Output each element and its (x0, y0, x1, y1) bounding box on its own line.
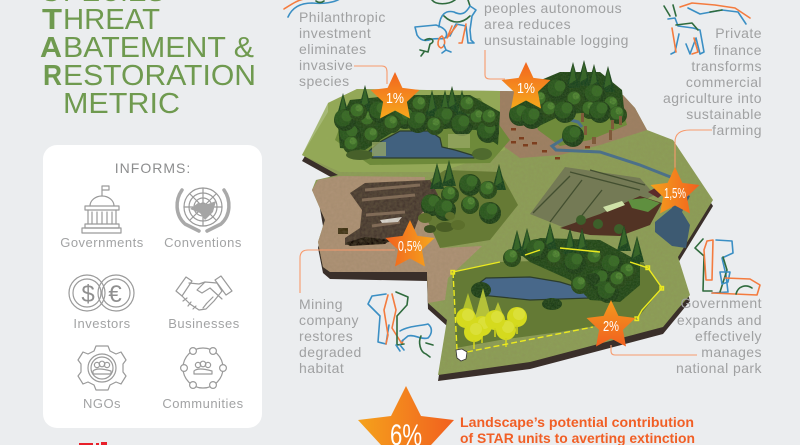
forest: top right (509, 60, 627, 147)
label: conventions: Conventions (164, 235, 242, 250)
text: private finance (663, 25, 762, 138)
label: businesses: Businesses (168, 316, 240, 331)
star: 1% philanthropic: 1% (386, 90, 404, 107)
star: 1.5% farming (650, 167, 700, 214)
text: private finance: sustainable (686, 106, 762, 122)
text: philanthropic investment: species (299, 73, 350, 89)
label: governments: Governments (60, 235, 144, 250)
icon: handshake (176, 276, 232, 310)
clipped red logo (79, 442, 107, 445)
farm terraces (530, 167, 664, 236)
text: mining company: degraded (299, 344, 362, 360)
star: 1% logging: 1% (517, 80, 535, 97)
star: 0.5% mining: 0,5% (398, 238, 422, 255)
text: mining company: habitat (299, 360, 344, 376)
icon: government building (82, 186, 121, 233)
restored yellow trees (456, 288, 527, 349)
text: private finance: Private (715, 25, 762, 41)
icon: NGO gear (78, 346, 126, 390)
forest: national park (471, 223, 644, 310)
title (40, 0, 256, 120)
forest: top left (334, 85, 500, 154)
grass surface (302, 89, 713, 375)
forest floor mid (425, 170, 518, 248)
title: ESTORATION (63, 60, 256, 92)
text: philanthropic investment: eliminates (299, 41, 367, 57)
icon: community network (181, 348, 226, 388)
forest: left shrubs and reeds (346, 134, 492, 160)
leader lines (300, 50, 712, 355)
text: government: expands and (677, 312, 762, 328)
text: autonomous area: unsustainable logging (484, 32, 629, 48)
title: BATEMENT & (63, 32, 254, 64)
title: A (40, 32, 62, 64)
star: 1% logging (502, 62, 550, 108)
text: private finance: agriculture into (663, 90, 762, 106)
forest clearing (530, 100, 627, 146)
forest: centre (421, 160, 506, 224)
text: philanthropic investment: invasive (299, 57, 353, 73)
park ground (452, 258, 662, 348)
star: 1.5% farming: 1,5% (664, 185, 686, 202)
star: 2% park (586, 300, 636, 346)
title: HREAT (63, 4, 160, 36)
quarry ground (312, 176, 482, 303)
text: autonomous area (484, 0, 629, 48)
animals: frog and deer top (415, 0, 476, 56)
strip mine pit (338, 180, 438, 246)
pointer cursor (456, 349, 467, 361)
text: mining company: company (299, 312, 359, 328)
shrubs: centre (418, 212, 465, 233)
animals: elephant and frog bottom (368, 292, 433, 357)
big star: 6% (358, 386, 454, 445)
tree stumps (511, 128, 590, 160)
animals: top left (284, 0, 341, 17)
river mouth (655, 190, 690, 248)
caption: Landscape’s potential contribution (460, 414, 694, 430)
text: government: Government (680, 295, 762, 311)
caption (460, 414, 695, 445)
landscape map (302, 60, 713, 381)
star: 1% philanthropic (370, 72, 420, 118)
map thickness (302, 95, 713, 381)
text: philanthropic investment: Philanthropic (299, 9, 386, 25)
icon: UN emblem (177, 188, 229, 231)
pond: park (478, 277, 592, 300)
animals: antelope and cat top right (664, 3, 750, 54)
pond: left (368, 131, 475, 158)
star: 2% park: 2% (603, 318, 619, 335)
text: philanthropic investment: investment (299, 25, 371, 41)
text: mining company (299, 296, 362, 376)
icon: currency coins: $ (81, 281, 95, 308)
title: T (42, 4, 62, 36)
river (552, 117, 673, 178)
label: communities: Communities (162, 396, 244, 411)
text: philanthropic investment (299, 9, 386, 89)
star: 0.5% mining (386, 220, 434, 266)
logged dirt area (495, 91, 647, 158)
animals: elephant and lion right (695, 239, 760, 295)
panel: informs (43, 145, 262, 428)
text: autonomous area: peoples autonomous (484, 0, 622, 16)
icon: currency coins (69, 275, 134, 311)
loggers (581, 113, 622, 144)
icon: currency coins: € (108, 281, 122, 308)
text: autonomous area: area reduces (484, 16, 571, 32)
text: government: manages (701, 344, 762, 360)
light grass patch (302, 89, 505, 172)
restoration boundary (451, 248, 664, 352)
text: government (676, 295, 763, 376)
text: private finance: commercial (686, 74, 762, 90)
label: investors: Investors (73, 316, 131, 331)
text: mining company: Mining (299, 296, 343, 312)
heading: informs: INFORMS: (115, 160, 191, 176)
text: mining company: restores (299, 328, 353, 344)
text: private finance: finance (714, 42, 762, 58)
text: private finance: transforms (691, 58, 762, 74)
text: government: national park (676, 360, 763, 376)
text: government: effectively (695, 328, 762, 344)
label: NGOs: NGOs (83, 396, 121, 411)
forest floor left (335, 98, 510, 165)
text: private finance: farming (712, 122, 762, 138)
title: METRIC (63, 88, 180, 120)
title: R (43, 60, 62, 92)
